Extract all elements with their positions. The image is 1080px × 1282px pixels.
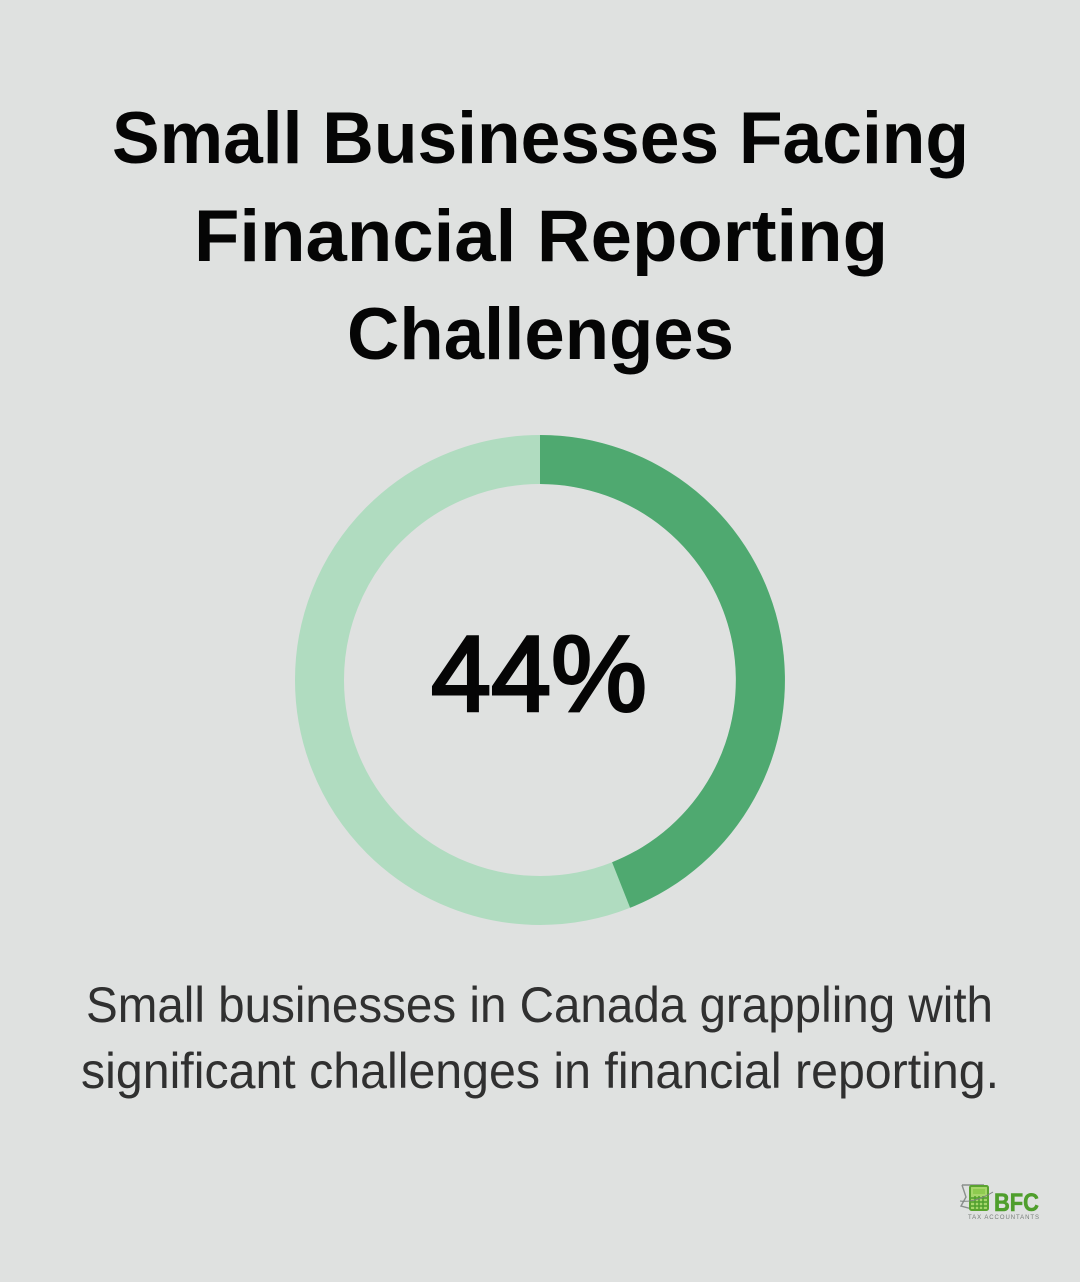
donut remainder segment xyxy=(320,460,760,900)
description text xyxy=(81,977,999,1099)
donut highlighted segment xyxy=(540,435,785,908)
logo: BFC Tax Accountants xyxy=(960,1185,1039,1221)
description text: significant challenges in financial reporting. xyxy=(81,1043,999,1099)
logo icon: calculator xyxy=(960,1185,993,1210)
title: Challenges xyxy=(347,294,734,375)
title: Financial Reporting xyxy=(194,196,888,277)
title xyxy=(112,98,969,375)
logo wordmark: BFC xyxy=(994,1189,1039,1217)
logo tagline: TAX ACCOUNTANTS xyxy=(968,1215,1039,1221)
donut value: 44% xyxy=(431,613,647,734)
title: Small Businesses Facing xyxy=(112,98,969,179)
description text: Small businesses in Canada grappling with xyxy=(86,977,993,1033)
donut chart: 44% xyxy=(320,435,785,908)
